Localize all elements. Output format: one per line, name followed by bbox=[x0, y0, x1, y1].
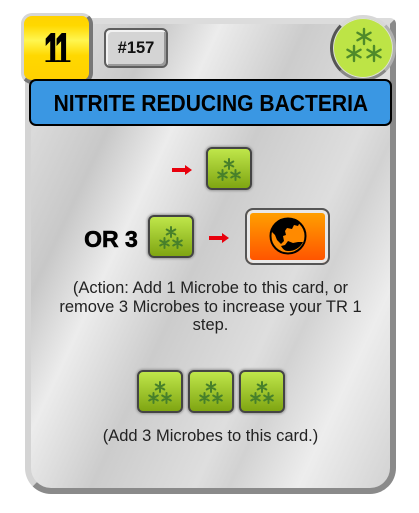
action description: step. bbox=[193, 316, 228, 334]
tag icon: microbe circle bbox=[330, 15, 396, 81]
microbe box action result bbox=[206, 147, 252, 190]
arrow 1 bbox=[172, 165, 192, 175]
effect description: (Add 3 Microbes to this card.) bbox=[103, 427, 318, 445]
terraform rating icon bbox=[245, 208, 330, 265]
OR 3 label: OR 3 bbox=[84, 226, 138, 252]
title bar: NITRITE REDUCING BACTERIA bbox=[53, 90, 368, 116]
microbe box 2 bbox=[188, 370, 234, 413]
action description bbox=[59, 279, 362, 334]
card number tag bbox=[104, 28, 168, 68]
arrow 2 bbox=[209, 233, 229, 243]
cost badge: 11 bbox=[44, 24, 68, 76]
cost badge bbox=[21, 13, 93, 84]
action description: (Action: Add 1 Microbe to this card, or bbox=[73, 279, 348, 297]
effect row: three microbes bbox=[135, 368, 288, 416]
action description: remove 3 Microbes to increase your TR 1 bbox=[59, 298, 362, 316]
microbe box 3 bbox=[239, 370, 285, 413]
title bar bbox=[29, 79, 392, 126]
microbe box 1 bbox=[137, 370, 183, 413]
microbe box spend bbox=[148, 215, 194, 258]
card number tag: #157 bbox=[118, 39, 154, 57]
